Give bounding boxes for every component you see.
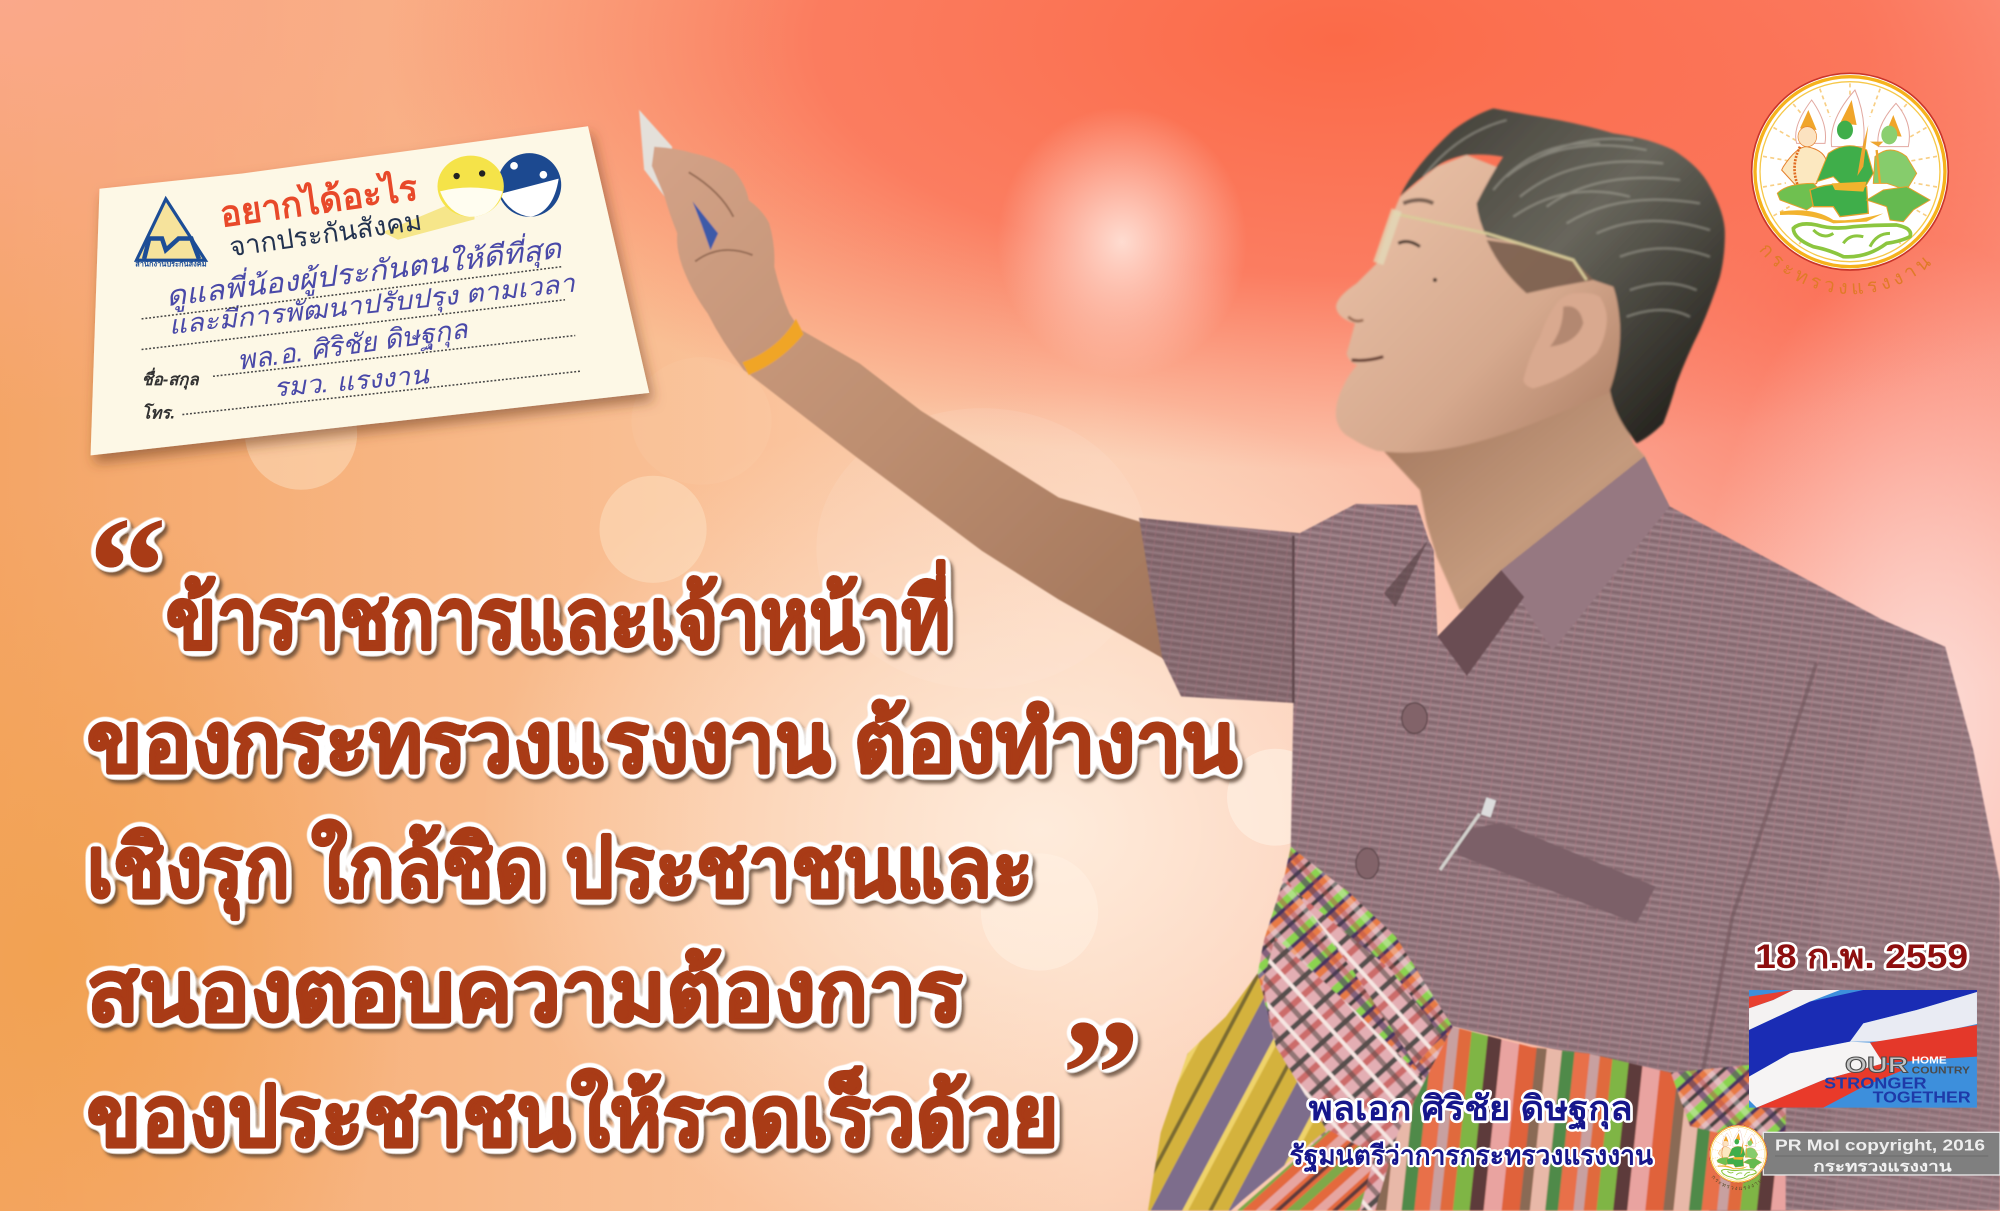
card heading: อยากได้อะไร xyxy=(217,166,420,235)
handwritten note: พล.อ. ศิริชัย ดิษฐกุล xyxy=(235,314,471,377)
card: social security comment card: โทร. xyxy=(142,402,175,422)
copyright bar: กระทรวงแรงงาน xyxy=(1813,1159,1952,1175)
copyright bar xyxy=(1763,1132,2000,1175)
Thai flag banner: HOME xyxy=(1912,1055,1947,1066)
name: พลเอก ศิริชัย ดิษฐกุล xyxy=(1309,1090,1633,1131)
Thai flag banner: COUNTRY xyxy=(1912,1065,1970,1076)
date: 18 ก.พ. 2559 xyxy=(1755,938,1968,976)
handwritten note: ดูแลพี่น้องผู้ประกันตนให้ดีที่สุด xyxy=(164,229,565,314)
card logo triangle xyxy=(135,199,207,269)
quote line 3: เชิงรุก ใกล้ชิด ประชาชนและ xyxy=(87,820,1033,921)
closing quote mark: ” xyxy=(1061,988,1140,1163)
handwritten note: และมีการพัฒนาปรับปรุง ตามเวลา xyxy=(167,270,577,341)
Thai flag banner xyxy=(1749,990,1977,1108)
handwritten note xyxy=(164,229,577,403)
yellow streak xyxy=(383,194,474,240)
mascot faces xyxy=(438,153,561,217)
Thai flag banner: TOGETHER xyxy=(1873,1089,1971,1106)
person: pha khao ma sash xyxy=(1148,847,1786,1210)
person: raised arm and hand holding card xyxy=(639,110,1167,661)
small seal: กระทรวงแรงงาน xyxy=(1712,1176,1762,1190)
card: social security comment card: ชื่อ-สกุล xyxy=(142,367,200,390)
copyright bar: PR MoI copyright, 2016 xyxy=(1775,1138,1985,1155)
card: social security comment card xyxy=(91,126,649,455)
Thai flag banner: OUR xyxy=(1845,1053,1908,1078)
card subheading: จากประกันสังคม xyxy=(228,206,424,262)
main quote xyxy=(87,485,1237,1163)
Thai flag banner: STRONGER xyxy=(1824,1076,1927,1093)
background bokeh circles xyxy=(245,357,1324,971)
quote line 4: สนองตอบความต้องการ xyxy=(87,944,963,1038)
quote line 2: ของกระทรวงแรงงาน ต้องทำงาน xyxy=(87,696,1237,790)
position: รัฐมนตรีว่าการกระทรวงแรงงาน xyxy=(1290,1141,1654,1174)
quote line 1: ข้าราชการและเจ้าหน้าที่ xyxy=(166,560,950,666)
person: shirt xyxy=(1139,457,2000,1210)
name caption xyxy=(1290,1090,1654,1174)
dotted lines and labels xyxy=(142,267,580,415)
small seal xyxy=(1709,1124,1768,1190)
opening quote mark: “ xyxy=(88,485,167,660)
handwritten note: รมว. แรงงาน xyxy=(272,361,430,403)
quote line 5: ของประชาชนให้รวดเร็วด้วย xyxy=(87,1064,1059,1163)
ministry seal xyxy=(1750,72,1950,294)
person: head, neck and hair xyxy=(1336,108,1725,610)
card logo triangle: สำนักงานประกันสังคม xyxy=(135,260,207,269)
ministry seal: กระทรวงแรงงาน xyxy=(1760,245,1931,294)
